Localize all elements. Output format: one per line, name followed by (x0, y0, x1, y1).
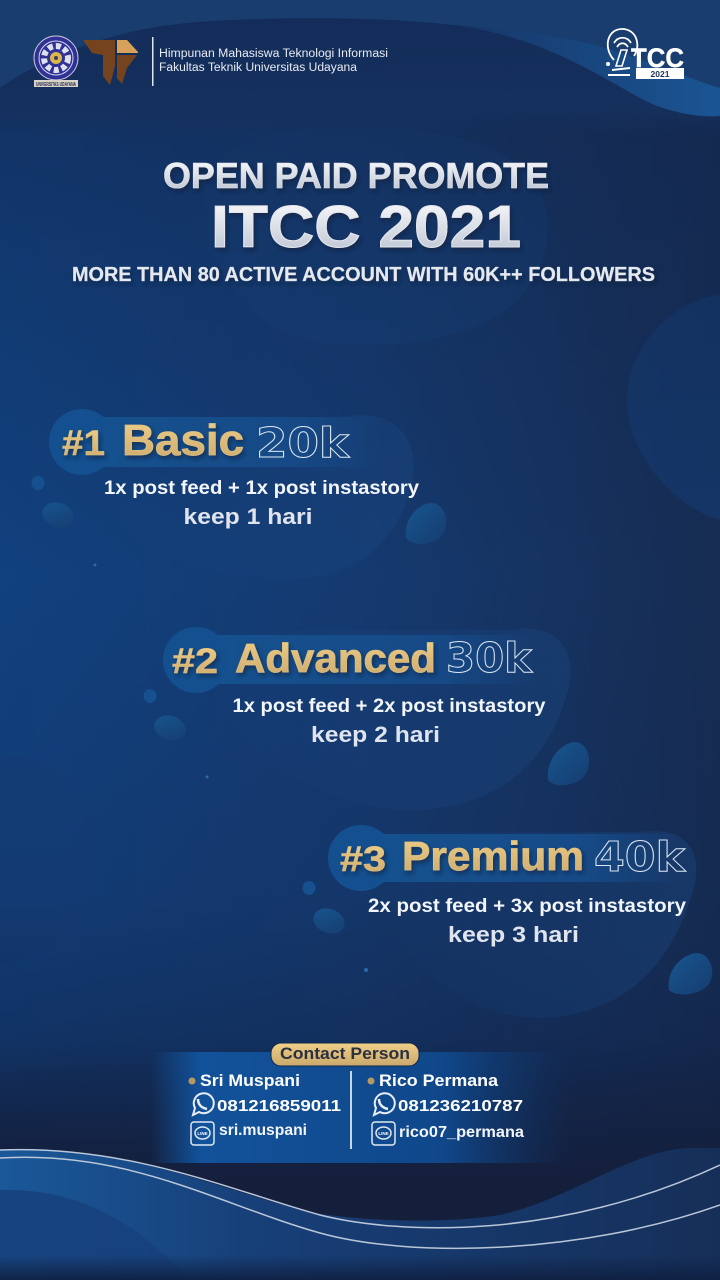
header divider (152, 37, 154, 86)
heading line 2: ITCC 2021 (211, 194, 521, 260)
contact: Rico Permana: 081236210787 (398, 1098, 523, 1115)
keep duration: keep 1 hari (184, 504, 312, 529)
details: 1x post feed + 2x post instastory (232, 695, 546, 717)
rank: #1 (62, 424, 105, 463)
contact badge (271, 1043, 419, 1066)
icon: line (191, 1122, 214, 1145)
icon: whatsapp (193, 1093, 214, 1115)
icon: line: LINE (197, 1131, 208, 1136)
contact: Rico Permana: Rico Permana (379, 1071, 499, 1090)
logo: Teknologi Informasi (83, 40, 138, 85)
panel: package 3 Premium (302, 825, 712, 1018)
subtitle: MORE THAN 80 ACTIVE ACCOUNT WITH 60K++ FOLLOWERS (72, 264, 655, 286)
contact: Rico Permana: rico07_permana (399, 1124, 524, 1141)
price: 40k (594, 833, 687, 881)
details: 2x post feed + 3x post instastory (368, 895, 686, 917)
contact: Sri Muspani: 081216859011 (217, 1098, 341, 1115)
logo: Universitas Udayana (34, 36, 78, 88)
heading line 1: OPEN PAID PROMOTE (163, 155, 549, 196)
name: Advanced (235, 635, 436, 681)
bottom wave (0, 1040, 720, 1280)
icon: line: LINE (378, 1131, 389, 1136)
panel: contact person (150, 1043, 570, 1163)
contact badge: Contact Person (280, 1045, 410, 1063)
title (72, 155, 655, 286)
logo: Universitas Udayana: UNIVERSITAS UDAYANA (36, 82, 76, 88)
logo: ITCC 2021 (606, 29, 684, 79)
icon: whatsapp (374, 1093, 395, 1115)
organisation name: Himpunan Mahasiswa Teknologi Informasi (159, 48, 388, 60)
logo: ITCC 2021: 2021 (651, 69, 670, 79)
panel: package 1 Basic (32, 409, 446, 578)
name: Premium (402, 833, 584, 879)
logo: ITCC 2021: TCC (631, 43, 684, 73)
organisation name: Fakultas Teknik Universitas Udayana (159, 62, 358, 74)
name: Basic (122, 416, 244, 465)
panel: package 2 Advanced (144, 627, 589, 810)
top wave header (0, 0, 720, 135)
contact: Sri Muspani: Sri Muspani (200, 1071, 300, 1090)
price: 20k (256, 419, 351, 467)
keep duration: keep 2 hari (311, 722, 440, 747)
details: 1x post feed + 1x post instastory (104, 477, 419, 499)
icon: line (372, 1122, 395, 1145)
rank: #3 (340, 840, 386, 879)
contact: Rico Permana (368, 1071, 524, 1145)
contact: Sri Muspani: sri.muspani (219, 1122, 307, 1139)
price: 30k (446, 634, 534, 682)
keep duration: keep 3 hari (448, 922, 579, 947)
contact: Sri Muspani (188, 1071, 341, 1145)
organisation name (159, 48, 388, 74)
rank: #2 (172, 642, 218, 681)
